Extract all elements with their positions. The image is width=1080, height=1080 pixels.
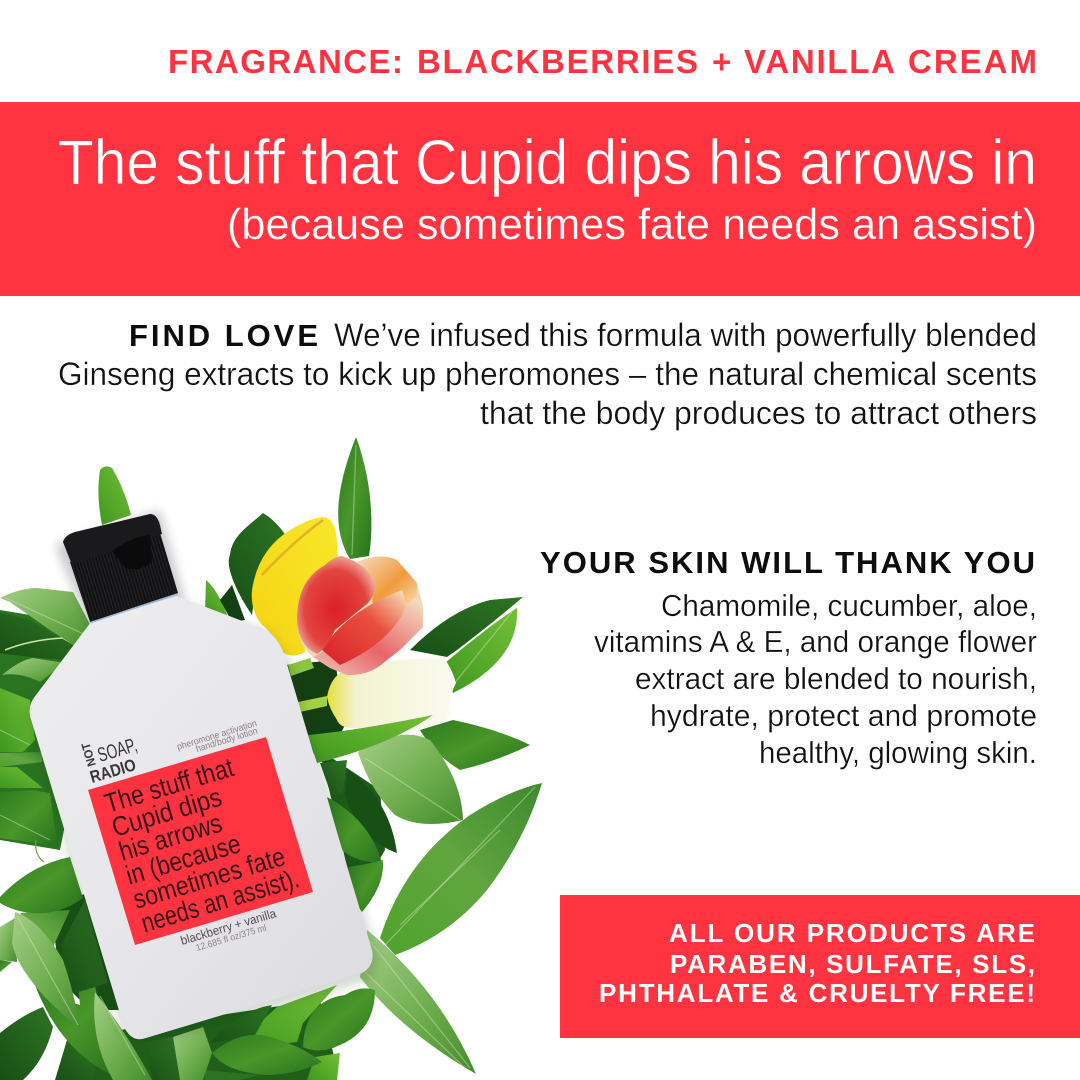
fragrance heading: VANILLA: [744, 43, 895, 80]
skin heading: YOUR SKIN WILL THANK YOU: [540, 545, 1035, 580]
red label text: [101, 743, 302, 939]
bottom leaves: [143, 1037, 180, 1080]
callout text: PARABEN, SULFATE, SLS,: [670, 949, 1035, 979]
middle leaves: [320, 760, 347, 797]
brand logo: NOT: [78, 741, 99, 768]
fragrance heading: +: [712, 43, 731, 80]
red label: [88, 737, 313, 945]
brand logo: RADIO: [88, 755, 138, 787]
find love body: Ginseng extracts to kick up pheromones – the natural chemical scents: [58, 356, 1037, 392]
find love paragraph: [58, 317, 1037, 431]
long bright leaf over tulip: [308, 715, 433, 763]
red label text: Cupid dips: [108, 782, 225, 843]
skin body: [594, 588, 1037, 770]
top leaves: [338, 437, 371, 559]
fragrance heading: CREAM: [908, 43, 1037, 80]
skin body: hydrate, protect and promote: [650, 698, 1037, 733]
skin body: extract are blended to nourish,: [635, 661, 1037, 696]
tulips: [252, 517, 456, 763]
lower left leaves: [20, 910, 70, 947]
banner title: The stuff that Cupid dips his arrows in: [58, 128, 1037, 198]
brand logo: [78, 734, 140, 787]
product type text: pheromone activation: [175, 717, 258, 752]
scent and size text: 12.685 fl oz/375 ml: [194, 922, 268, 953]
right large leaves: [380, 783, 542, 955]
tulip stems: [288, 658, 314, 676]
bottle body: [30, 596, 373, 1039]
red headline banner: [0, 102, 1080, 296]
white tulip: [327, 657, 456, 728]
product type text: hand/body lotion: [194, 725, 259, 754]
find love body: [58, 317, 1037, 431]
fragrance heading: BLACKBERRIES: [417, 43, 698, 80]
callout text: PHTHALATE & CRUELTY FREE!: [599, 978, 1035, 1008]
red tulip outer petal: [313, 597, 423, 675]
red tulip centre petal: [322, 590, 405, 665]
red label text: needs an assist).: [138, 863, 302, 938]
leaves behind the bottle: [0, 437, 542, 1080]
red label text: his arrows: [115, 808, 226, 867]
red tulip back petal: [357, 556, 417, 612]
dark mass behind stems: [285, 660, 345, 765]
bottom right leaves: [307, 1053, 340, 1080]
product photo: bottle on tulips and leaves: [0, 437, 542, 1080]
fragrance heading: [168, 43, 1037, 80]
skin body: Chamomile, cucumber, aloe,: [661, 588, 1037, 623]
skin body: vitamins A & E, and orange flower: [594, 624, 1037, 659]
yellow tulip: [252, 517, 338, 656]
cap shadow: [55, 510, 185, 630]
scent and size text: blackberry + vanilla: [179, 906, 278, 948]
right leaves: [410, 597, 523, 657]
find love body: We’ve infused this formula with powerfully blended: [334, 317, 1037, 353]
bottle shadow: [26, 600, 378, 1046]
banner subtitle: (because sometimes fate needs an assist): [227, 200, 1037, 249]
callout text: [599, 918, 1035, 1008]
brand logo: SOAP,: [95, 734, 140, 767]
skin paragraph: [540, 545, 1037, 770]
callout text: ALL OUR PRODUCTS ARE: [669, 918, 1035, 948]
fragrance heading: FRAGRANCE:: [168, 43, 403, 80]
stray stem: [36, 840, 44, 862]
skin body: healthy, glowing skin.: [759, 735, 1037, 770]
bottle cap: [70, 533, 178, 622]
bottle: [30, 514, 373, 1039]
red tulip silhouette: [297, 556, 423, 675]
red label text: sometimes fate: [130, 841, 289, 915]
free-from callout: [560, 895, 1080, 1038]
red label text: in (because: [122, 828, 244, 891]
red tulip left petal: [297, 556, 375, 654]
find love heading: FIND LOVE: [129, 318, 318, 353]
veins: [0, 445, 535, 1075]
find love body: that the body produces to attract others: [480, 395, 1037, 431]
upper left leaves: [0, 790, 57, 845]
red label text: The stuff that: [101, 752, 238, 819]
dark underlays filling gaps between leaves: [0, 610, 70, 850]
